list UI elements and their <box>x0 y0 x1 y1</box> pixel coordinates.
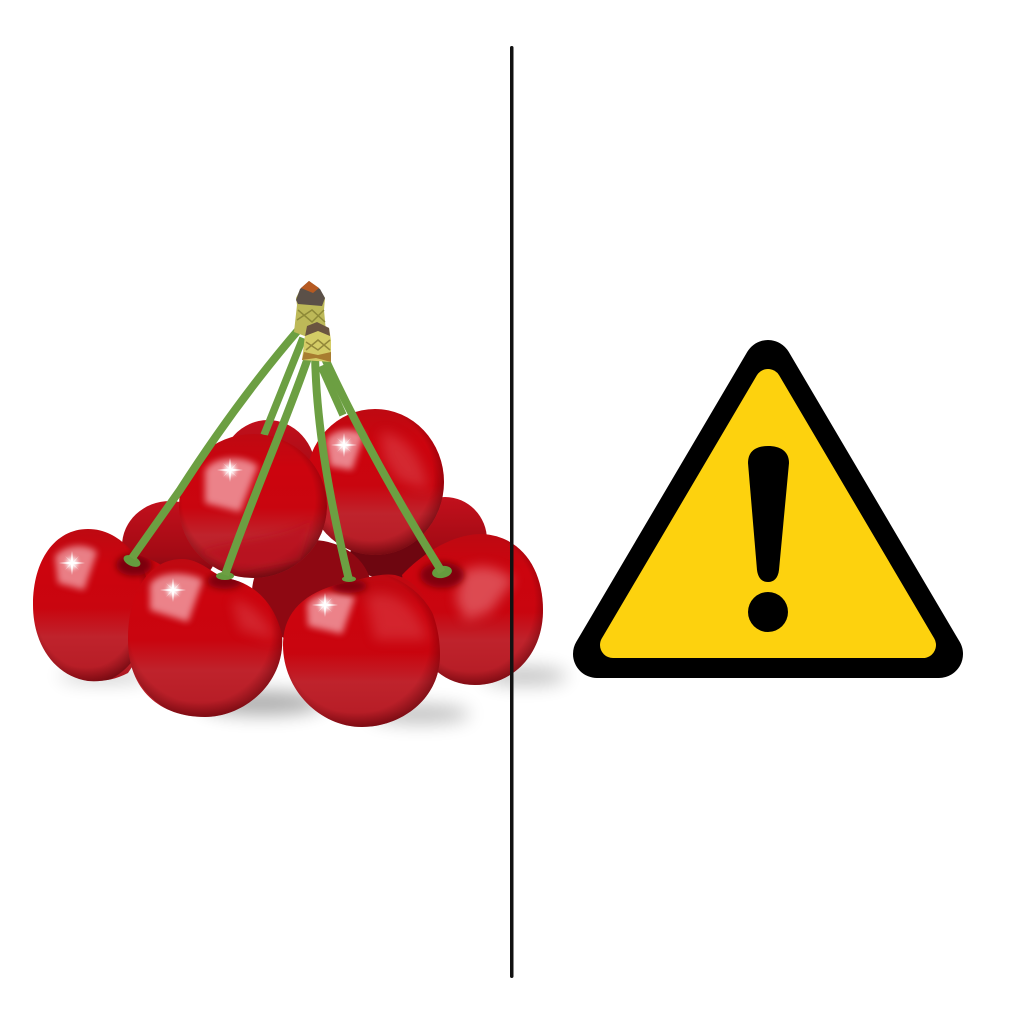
upper knot <box>294 281 326 338</box>
front right cherry <box>280 570 445 730</box>
rear stems <box>264 338 343 435</box>
exclamation mark <box>748 446 789 632</box>
black outer triangle <box>597 364 939 654</box>
vertical divider <box>510 46 514 978</box>
lower knot <box>302 322 331 362</box>
upper right cherry <box>310 409 444 555</box>
back cherries <box>122 420 487 644</box>
yellow inner triangle <box>613 382 923 645</box>
front left cherry <box>125 555 287 720</box>
cherry cluster illustration <box>28 281 567 730</box>
ground shadows <box>59 667 567 723</box>
stems <box>122 328 453 582</box>
warning triangle icon <box>597 364 939 654</box>
lower right cherry <box>400 530 546 688</box>
stem knots <box>294 281 331 362</box>
upper front cherry <box>175 430 330 580</box>
stem bases <box>122 553 453 582</box>
far left cherry <box>33 529 160 682</box>
